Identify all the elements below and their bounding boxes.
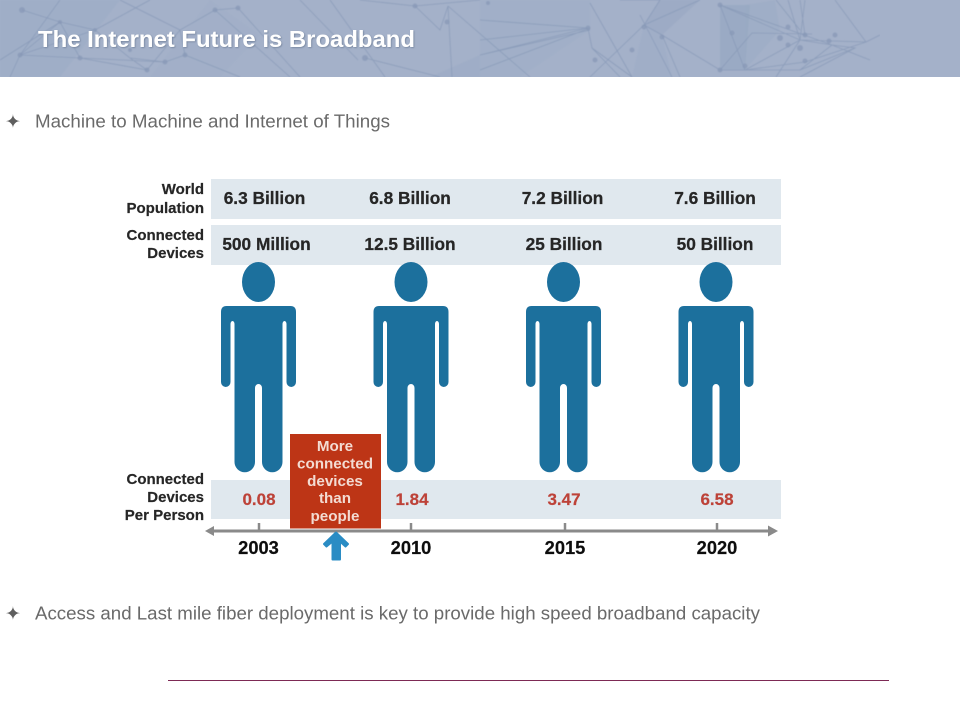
timeline axis: 2020 [697, 537, 737, 558]
row labels: Per Person [125, 507, 204, 524]
row band: connected devices per person: 0.08 [242, 490, 276, 509]
callout: more connected devices than people: connected [297, 456, 373, 472]
timeline axis: 2010 [391, 537, 431, 558]
bullet: access and last mile fiber: ✦ [5, 604, 21, 625]
row labels [125, 181, 204, 524]
timeline axis [205, 523, 778, 558]
row band: connected devices per person: 1.84 [395, 490, 429, 509]
row band: world population: 7.2 Billion [522, 188, 603, 208]
icon: person 2020 [678, 262, 754, 472]
row band: connected devices [211, 225, 781, 265]
row labels: Devices [147, 245, 204, 262]
row band: connected devices per person: 3.47 [547, 490, 581, 509]
header banner [0, 0, 960, 77]
row labels: World [162, 181, 204, 198]
row labels: Connected [126, 471, 204, 488]
row band: world population: 6.8 Billion [369, 188, 451, 208]
callout: more connected devices than people: people [311, 508, 359, 525]
row band: connected devices: 500 Million [222, 234, 311, 254]
arrow: crossover marker [324, 532, 348, 560]
icon: person 2003 [221, 262, 296, 472]
header title: The Internet Future is Broadband [38, 26, 415, 52]
callout: more connected devices than people [290, 434, 381, 528]
timeline axis: 2015 [545, 537, 585, 558]
bullet: machine to machine: Machine to Machine and Internet of Things [35, 110, 390, 132]
row labels: Connected [126, 227, 204, 244]
row band: world population: 7.6 Billion [674, 188, 756, 208]
callout: more connected devices than people: More [317, 438, 353, 455]
callout: more connected devices than people: devices [307, 473, 363, 490]
row band: connected devices: 25 Billion [526, 234, 602, 254]
row band: connected devices per person: 6.58 [700, 490, 734, 509]
row band: connected devices per person [211, 480, 781, 519]
callout: more connected devices than people: than [319, 490, 351, 507]
row band: connected devices: 12.5 Billion [364, 234, 456, 254]
icon: person 2015 [526, 262, 601, 472]
row labels: Population [126, 200, 204, 217]
icon: person 2010 [374, 262, 448, 472]
bullet: access and last mile fiber: Access and Last mile fiber deployment is key to provide high speed broadband capacity [35, 602, 761, 624]
timeline axis: 2003 [238, 537, 279, 558]
row band: connected devices: 50 Billion [677, 234, 753, 254]
bullet: machine to machine: ✦ [5, 112, 21, 133]
row band: world population: 6.3 Billion [224, 188, 305, 208]
row labels: Devices [147, 489, 204, 506]
infographic: connected devices vs people [125, 179, 781, 560]
row band: world population [211, 179, 781, 219]
